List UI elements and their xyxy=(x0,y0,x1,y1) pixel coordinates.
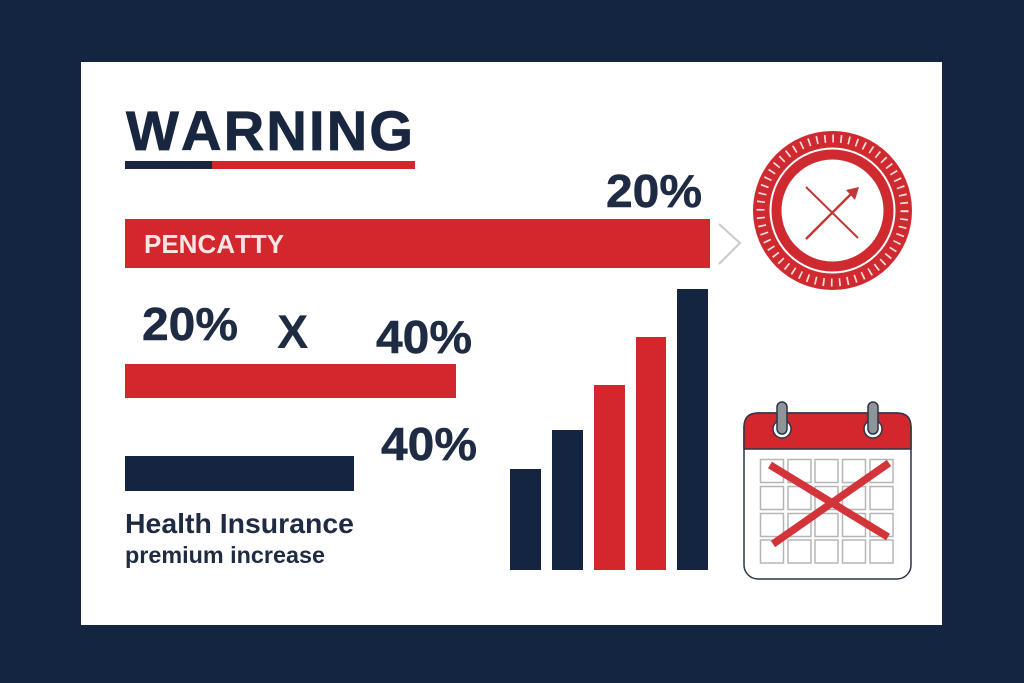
panel: white card xyxy=(81,62,942,625)
navy bar xyxy=(125,456,354,491)
text: premium increase: premium increase xyxy=(125,542,325,568)
icon: calendar crossed out xyxy=(744,402,911,579)
label: 20% above penalty bar: 20% xyxy=(606,165,702,217)
label: 40% upper: 40% xyxy=(376,311,472,363)
red bar xyxy=(125,364,456,398)
label: X: X xyxy=(277,305,308,358)
arrow: chevron xyxy=(719,224,740,264)
label: 20%: 20% xyxy=(142,298,238,350)
penalty bar xyxy=(125,219,710,268)
penalty bar label: PENCATTY xyxy=(144,229,284,259)
label: 40% lower: 40% xyxy=(381,418,477,470)
title underline xyxy=(125,161,415,169)
icon: red seal with crossed arrow xyxy=(753,131,912,290)
text: health insurance: Health Insurance xyxy=(125,508,354,539)
title: WARNING xyxy=(126,99,415,162)
bar chart xyxy=(510,289,708,570)
